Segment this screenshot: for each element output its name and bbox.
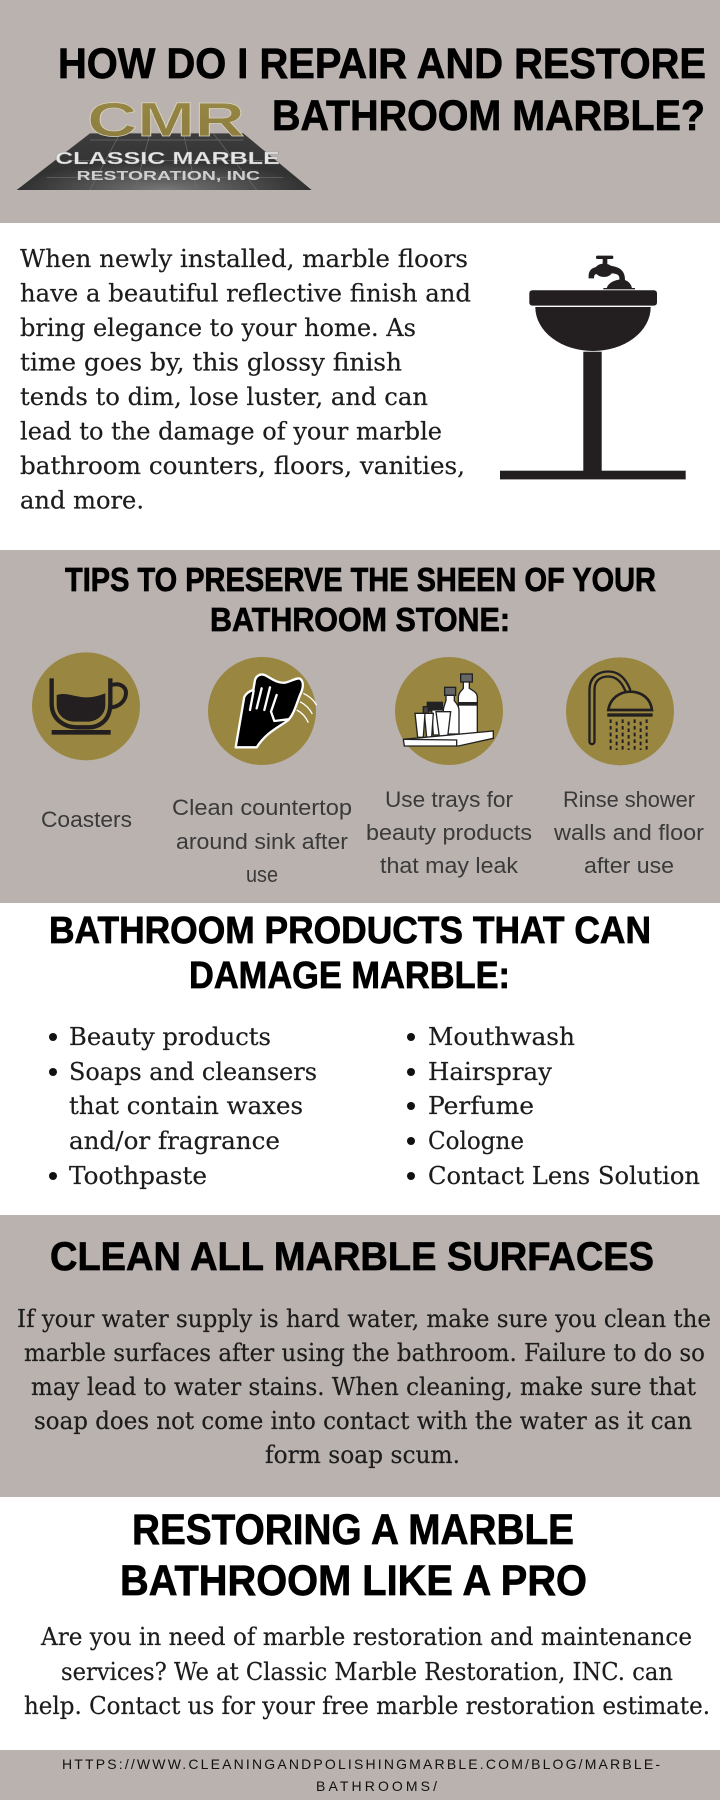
list: products left column: Beauty products	[69, 1022, 271, 1051]
text block: tip labels: walls and floor	[553, 820, 704, 845]
text block: tip labels: beauty products	[366, 820, 532, 845]
heading: tips	[65, 561, 656, 638]
heading: restoring a marble bathroom	[120, 1506, 587, 1605]
panel: footer background	[0, 1750, 720, 1800]
icon: CMR logo: CMR	[87, 94, 245, 147]
text block: cleaning advice: soap does not come into contact with the water as it can	[34, 1406, 692, 1435]
list: products right column: Perfume	[428, 1091, 534, 1120]
list: products left column: and/or fragrance	[69, 1126, 280, 1155]
icon: coffee cup on coaster	[32, 652, 140, 760]
list: products right column: Contact Lens Solution	[428, 1161, 700, 1190]
heading: damaging products	[49, 910, 651, 997]
text block: call to action: Are you in need of marble restoration and maintenance	[40, 1622, 692, 1651]
list: products right column	[407, 1022, 700, 1190]
list: products right column: Cologne	[428, 1126, 524, 1155]
list: products right column: Mouthwash	[428, 1022, 575, 1051]
heading: clean all marble surfaces: CLEAN ALL MARBLE SURFACES	[50, 1235, 654, 1279]
icon: CMR logo: CLASSIC MARBLE	[55, 148, 280, 168]
text block: tip labels: after use	[584, 853, 674, 878]
text block: introduction	[20, 244, 471, 514]
heading: restoring a marble bathroom: RESTORING A MARBLE	[132, 1506, 574, 1554]
text block: introduction: time goes by, this glossy finish	[20, 348, 402, 376]
footer: source URL: HTTPS://WWW.CLEANINGANDPOLISHINGMARBLE.COM/BLOG/MARBLE-	[62, 1756, 660, 1772]
text block: cleaning advice	[17, 1304, 711, 1469]
heading: tips: BATHROOM STONE:	[210, 601, 510, 638]
list: products left column: Soaps and cleansers	[69, 1057, 317, 1086]
list: products left column	[49, 1022, 317, 1190]
panel: tips background	[0, 550, 720, 903]
text block: tip labels: use	[246, 862, 278, 887]
panel: header background	[0, 0, 720, 223]
text block: introduction: When newly installed, marble floors	[20, 244, 468, 273]
icon: CMR logo: RESTORATION, INC	[77, 168, 261, 183]
list: products left column: Toothpaste	[69, 1161, 207, 1190]
footer: source URL: BATHROOMS/	[316, 1778, 437, 1794]
icon: pedestal sink	[500, 256, 686, 479]
text block: introduction: bathroom counters, floors, vanities,	[20, 451, 465, 480]
text block: call to action: services? We at Classic Marble Restoration, INC. can	[61, 1657, 673, 1686]
heading: tips: TIPS TO PRESERVE THE SHEEN OF YOUR	[65, 561, 656, 598]
icon: CMR logo	[17, 94, 312, 190]
text block: call to action	[24, 1622, 710, 1720]
icon: hand wiping with cloth	[208, 657, 317, 765]
title	[58, 40, 706, 140]
text block: tip labels: that may leak	[380, 853, 519, 878]
text block: introduction: and more.	[20, 486, 144, 514]
icon: tray with beauty products	[395, 657, 503, 765]
text block: tip labels: Clean countertop	[172, 795, 352, 820]
text block: tip labels: Coasters	[41, 807, 132, 832]
heading: restoring a marble bathroom: BATHROOM LIKE A PRO	[120, 1557, 587, 1605]
list: products left column: that contain waxes	[69, 1091, 303, 1120]
text block: cleaning advice: may lead to water stains. When cleaning, make sure that	[31, 1372, 696, 1401]
list: products right column: Hairspray	[428, 1057, 552, 1086]
heading: damaging products: DAMAGE MARBLE:	[189, 955, 510, 997]
text block: introduction: lead to the damage of your marble	[20, 416, 442, 446]
text block: introduction: tends to dim, lose luster, and can	[20, 382, 428, 411]
text block: tip labels: Use trays for	[385, 787, 513, 812]
text block: cleaning advice: form soap scum.	[265, 1440, 460, 1469]
footer: source URL	[62, 1756, 660, 1794]
text block: introduction: bring elegance to your home. As	[20, 313, 416, 342]
panel: clean surfaces background	[0, 1215, 720, 1497]
heading: damaging products: BATHROOM PRODUCTS THAT CAN	[49, 910, 651, 952]
text block: tip labels: around sink after	[176, 829, 348, 854]
text block: tip labels: Rinse shower	[563, 787, 695, 812]
text block: tip labels	[41, 787, 704, 887]
icon: faucet	[589, 256, 635, 289]
text block: introduction: have a beautiful reflective finish and	[20, 278, 471, 308]
icon: shower head	[566, 657, 674, 765]
